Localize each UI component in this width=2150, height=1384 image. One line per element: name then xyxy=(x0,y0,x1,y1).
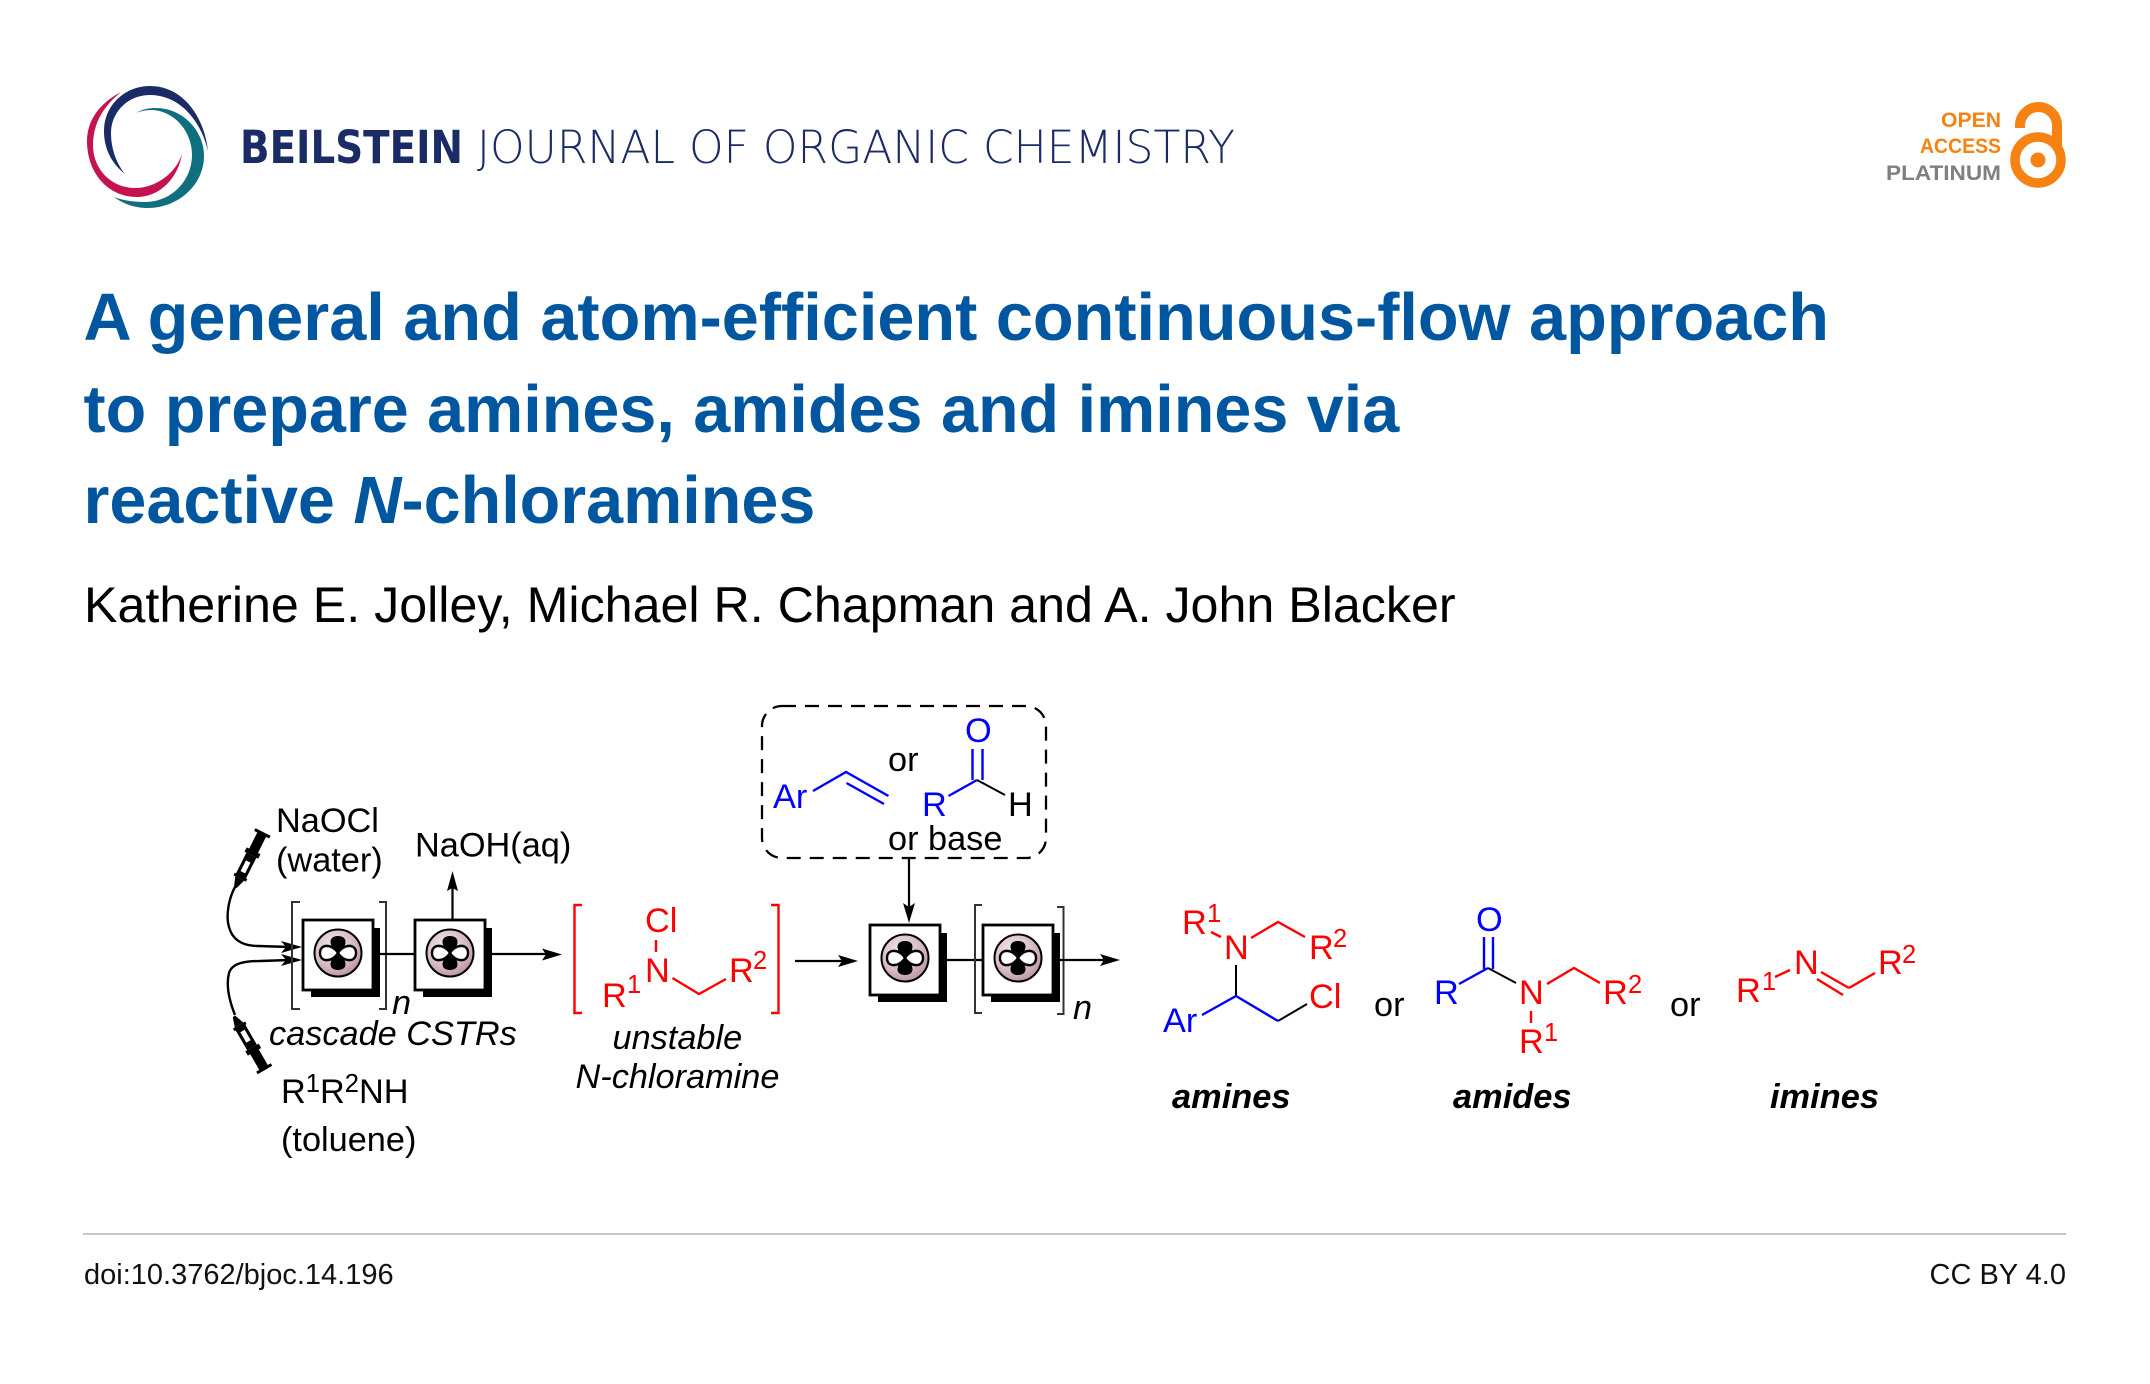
bracket left xyxy=(975,905,982,1013)
product: imines: R xyxy=(1878,944,1903,982)
product: amides: R xyxy=(1603,974,1628,1012)
label cascade CSTRs: cascade CSTRs xyxy=(269,1015,517,1053)
structure: N-chloramine: 1 xyxy=(627,971,641,999)
footer rule xyxy=(83,1233,2066,1235)
product: amines: R xyxy=(1182,904,1207,942)
product: amides: N xyxy=(1519,974,1544,1012)
structure: N-chloramine: R xyxy=(729,952,754,990)
journal name: BEILSTEIN xyxy=(240,121,463,174)
bracket left xyxy=(292,902,300,1009)
product: amides: O xyxy=(1476,901,1503,939)
arrow to chloramine xyxy=(492,948,562,960)
label toluene: (toluene) xyxy=(281,1121,416,1159)
curved feed line top xyxy=(228,887,290,947)
icon: syringe amine xyxy=(227,1012,272,1074)
doi: doi:10.3762/bjoc.14.196 xyxy=(84,1259,394,1291)
product: amides: 2 xyxy=(1628,971,1642,999)
journal name: JOURNAL OF ORGANIC CHEMISTRY xyxy=(477,121,1235,174)
label amine feed: 1 xyxy=(306,1070,320,1098)
product: amines: 1 xyxy=(1207,900,1221,928)
product: amines: amines xyxy=(1172,1078,1291,1116)
structure: aldehyde xyxy=(922,712,1033,824)
panel: dashed reagent box xyxy=(762,706,1046,858)
CSTR 1 xyxy=(303,920,380,997)
structure: N-chloramine xyxy=(602,902,767,1015)
label unstable N-chloramine xyxy=(576,1019,779,1096)
structure: styrene xyxy=(773,772,888,816)
label NaOH: NaOH(aq) xyxy=(415,826,571,864)
title xyxy=(84,281,1829,538)
title: to prepare amines, amides and imines via xyxy=(84,373,1400,447)
arrow to products xyxy=(1060,954,1120,966)
product: amines: R xyxy=(1309,929,1334,967)
red brackets xyxy=(574,905,778,1013)
icon: Beilstein journal logo xyxy=(87,86,208,208)
label unstable N-chloramine: unstable xyxy=(612,1019,742,1057)
label amine feed: NH xyxy=(359,1073,408,1111)
label amine feed: R xyxy=(281,1073,306,1111)
structure: N-chloramine: N xyxy=(645,952,670,990)
icon: syringe NaOCl xyxy=(228,828,271,891)
structure: N-chloramine: Cl xyxy=(645,902,677,940)
arrowheads into reactor xyxy=(281,941,302,966)
product: amides xyxy=(1434,901,1642,1116)
product: imines: 2 xyxy=(1902,941,1916,969)
label or: or xyxy=(1374,986,1404,1024)
open access platinum badge: ACCESS xyxy=(1920,135,2001,158)
connector line xyxy=(380,953,415,955)
product: amines: Cl xyxy=(1309,978,1341,1016)
label or: or xyxy=(888,741,918,779)
curved feed line bottom xyxy=(228,960,290,1015)
product: amides: R xyxy=(1434,974,1459,1012)
panel: second reactor cascade xyxy=(870,905,1120,1027)
authors: Katherine E. Jolley, Michael R. Chapman and A. John Blacker xyxy=(84,577,1456,633)
product: amines: 2 xyxy=(1333,925,1347,953)
structure: aldehyde: O xyxy=(965,712,992,750)
label amine feed: R xyxy=(320,1073,345,1111)
bracket right xyxy=(1057,907,1064,1014)
title: A general and atom-efficient continuous-flow approach xyxy=(84,281,1829,355)
CSTR 2 xyxy=(415,920,492,997)
product: imines: imines xyxy=(1770,1078,1879,1116)
structure: N-chloramine: 2 xyxy=(753,947,767,975)
product: amines: Ar xyxy=(1163,1002,1197,1040)
title: reactive N-chloramines xyxy=(84,464,815,538)
label water: (water) xyxy=(276,842,383,880)
panel: flow setup for N-chloramine formation xyxy=(227,802,571,1159)
product: amines: N xyxy=(1224,929,1249,967)
label or: or xyxy=(1670,986,1700,1024)
label NaOCl: NaOCl xyxy=(276,802,379,840)
product: amides: R xyxy=(1519,1023,1544,1061)
product: amides: amides xyxy=(1453,1078,1572,1116)
structure: N-chloramine: R xyxy=(602,977,627,1015)
bracket right xyxy=(379,902,386,1009)
label or base: or base xyxy=(888,820,1002,858)
product: amines xyxy=(1163,900,1347,1116)
product: imines: R xyxy=(1736,972,1761,1010)
connector line xyxy=(947,959,983,961)
CSTR 3 xyxy=(870,925,947,1002)
open access platinum badge xyxy=(1886,107,2061,185)
arrow up to NaOH xyxy=(447,871,458,920)
CSTR 4 xyxy=(983,925,1060,1002)
arrow to second reactor xyxy=(795,955,858,967)
label n: n xyxy=(1073,989,1092,1027)
structure: aldehyde: R xyxy=(922,786,947,824)
product: imines: N xyxy=(1794,944,1819,982)
product: amides: 1 xyxy=(1544,1019,1558,1047)
label n: n xyxy=(392,984,411,1022)
open access platinum badge: OPEN xyxy=(1941,109,2001,132)
structure: styrene: Ar xyxy=(773,778,807,816)
product: imines: 1 xyxy=(1762,968,1776,996)
label unstable N-chloramine: N-chloramine xyxy=(576,1058,779,1096)
license: CC BY 4.0 xyxy=(1930,1259,2066,1291)
open access platinum badge: PLATINUM xyxy=(1886,162,2001,185)
panel: unstable N-chloramine xyxy=(574,902,779,1096)
structure: aldehyde: H xyxy=(1008,786,1033,824)
product: imines xyxy=(1736,941,1916,1116)
arrow down from reagents xyxy=(903,858,915,923)
label amine feed: 2 xyxy=(345,1070,359,1098)
